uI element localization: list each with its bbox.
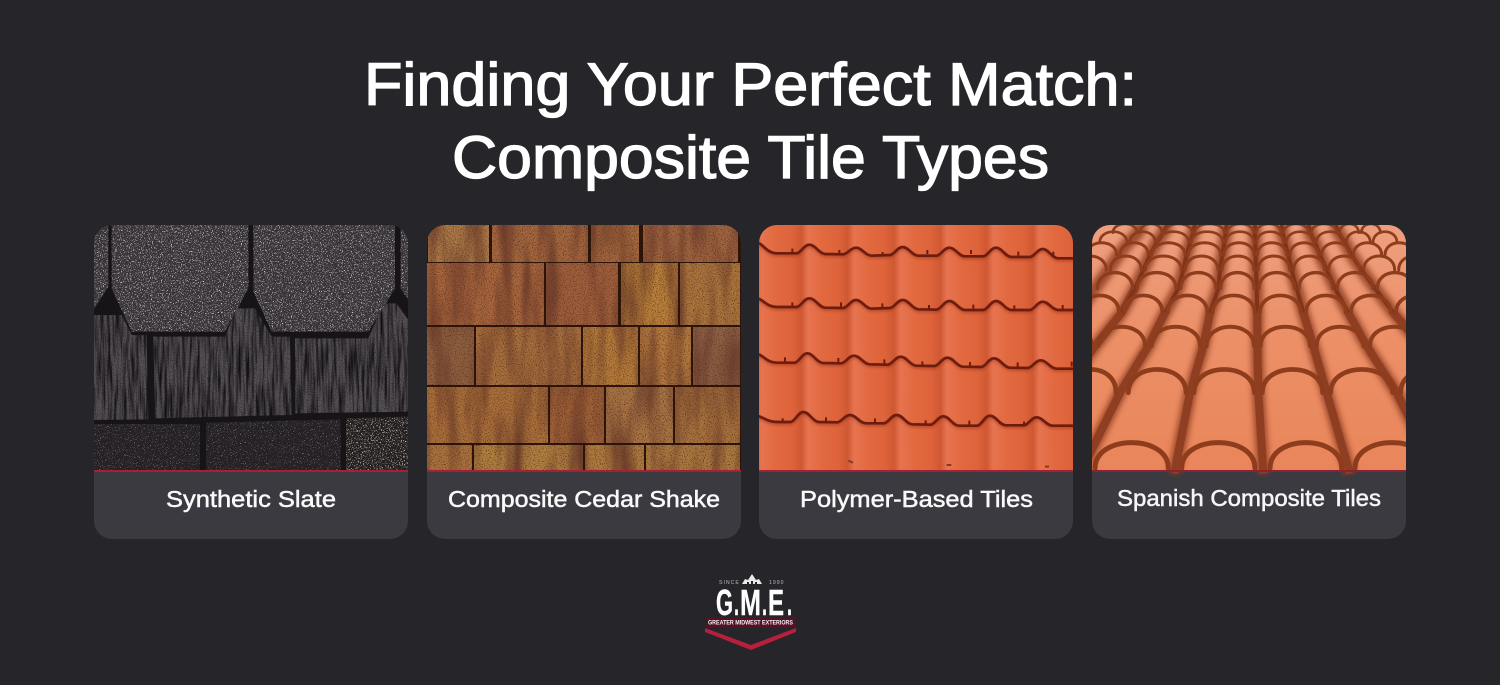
image: spanish barrel tiles [1092,225,1406,478]
chevron [705,628,796,650]
panel: composite cedar shake [427,225,741,539]
ribbon [705,617,797,627]
label band: polymer tiles [759,470,1073,472]
panel: synthetic slate [93,223,410,539]
label: Spanish Composite Tiles: Spanish Composite Tiles [1117,485,1381,511]
label band: synthetic slate [94,470,408,472]
wordmark: G [716,582,733,623]
label band: spanish tiles [1092,470,1406,472]
icon: house roofline [742,574,762,584]
logo: G.M.E. Greater Midwest Exteriors: . [787,582,792,623]
image: cedar shake tiles [427,225,740,470]
wordmark: M [740,582,761,623]
ribbon text: GREATER MIDWEST EXTERIORS [708,620,794,626]
label: Polymer-Based Tiles: Polymer-Based Tiles [800,486,1033,512]
title: Composite Tile Types [452,124,1049,191]
image: dark slate shingles [93,223,410,471]
title [364,51,1137,191]
since 1990 text: SINCE [719,580,740,586]
panel: polymer-based tiles [757,223,1082,539]
label band: cedar shake [427,470,741,472]
since 1990 text [719,580,785,586]
wordmark: . [734,582,739,623]
logo: G.M.E. Greater Midwest Exteriors [705,574,797,650]
image: polymer roof tiles [757,223,1082,470]
label: Composite Cedar Shake: Composite Cedar Shake [448,486,720,512]
title: Finding Your Perfect Match: [364,51,1137,118]
since 1990 text: 1990 [769,580,785,586]
wordmark: E [768,582,784,623]
label: Synthetic Slate: Synthetic Slate [166,486,336,512]
wordmark: . [762,582,767,623]
panel: spanish composite tiles [1092,225,1406,539]
wordmark [716,582,792,623]
